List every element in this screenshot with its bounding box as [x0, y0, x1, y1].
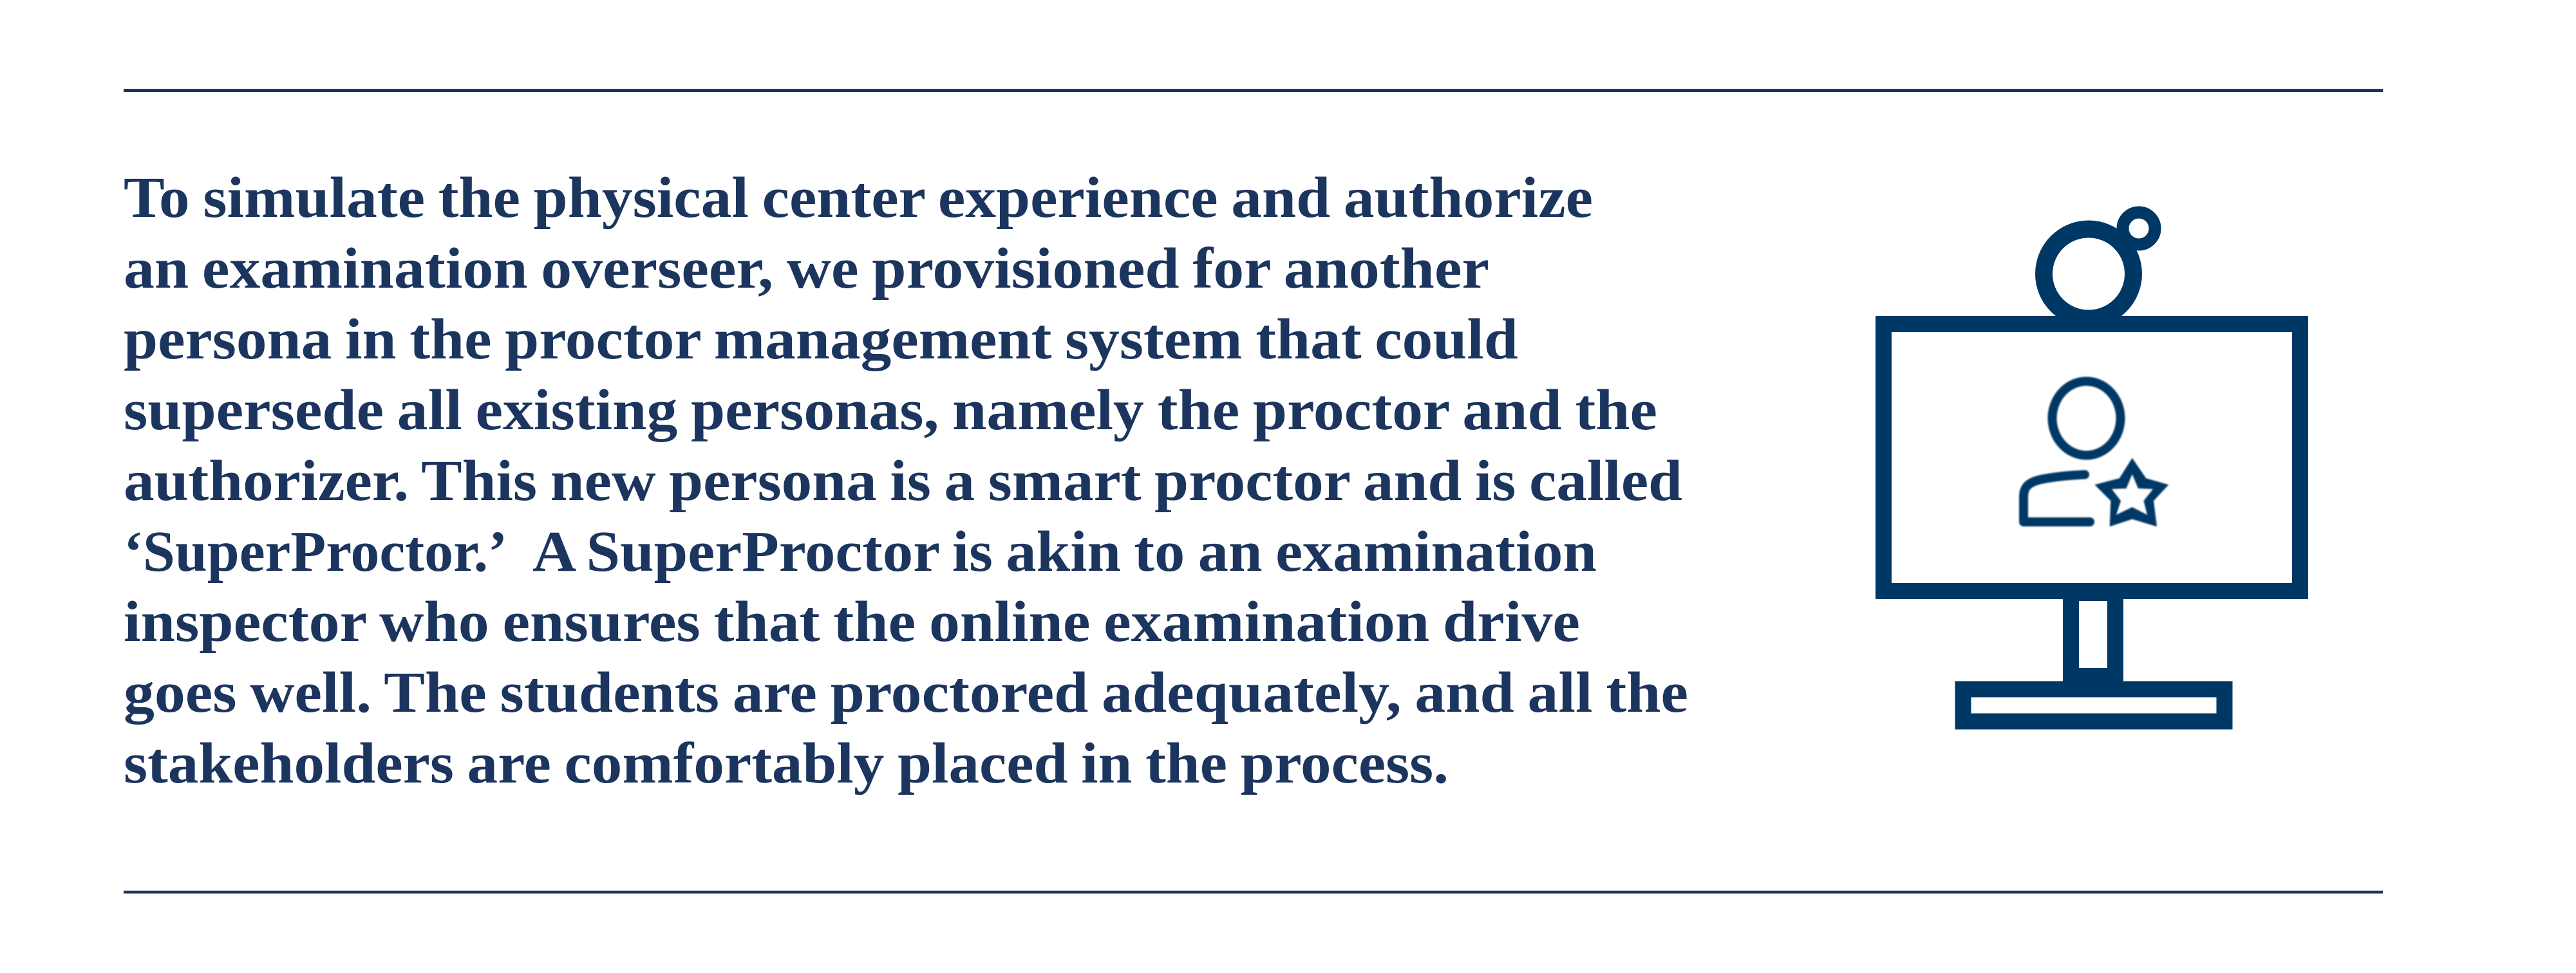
monitor stand — [2071, 593, 2116, 676]
body text paragraph: A SuperProctor is akin to an examination — [532, 520, 1597, 584]
body text paragraph: inspector who ensures that the online examination drive — [124, 590, 1580, 654]
monitor base — [1963, 689, 2224, 721]
body text paragraph: authorizer. This new persona is a smart proctor and is called — [124, 449, 1682, 513]
icon: webcam — [2044, 212, 2155, 319]
body text paragraph: To simulate the physical center experience and authorize — [124, 166, 1593, 230]
body text paragraph: ‘SuperProctor.’ — [124, 520, 507, 584]
star — [2094, 458, 2168, 526]
monitor screen — [1884, 324, 2300, 591]
body text paragraph: supersede all existing personas, namely the proctor and the — [124, 378, 1657, 442]
body text paragraph: goes well. The students are proctored adequately, and all the — [124, 661, 1688, 725]
user shoulders — [2024, 475, 2090, 522]
body text paragraph: stakeholders are comfortably placed in the process. — [124, 732, 1449, 795]
icon: monitor with webcam and star user — [1884, 212, 2300, 721]
icon: user with star — [2024, 381, 2168, 526]
body text paragraph — [124, 166, 1688, 795]
user head — [2053, 381, 2121, 456]
body text paragraph: persona in the proctor management system that could — [124, 308, 1518, 371]
body text paragraph: an examination overseer, we provisioned for another — [124, 237, 1489, 301]
